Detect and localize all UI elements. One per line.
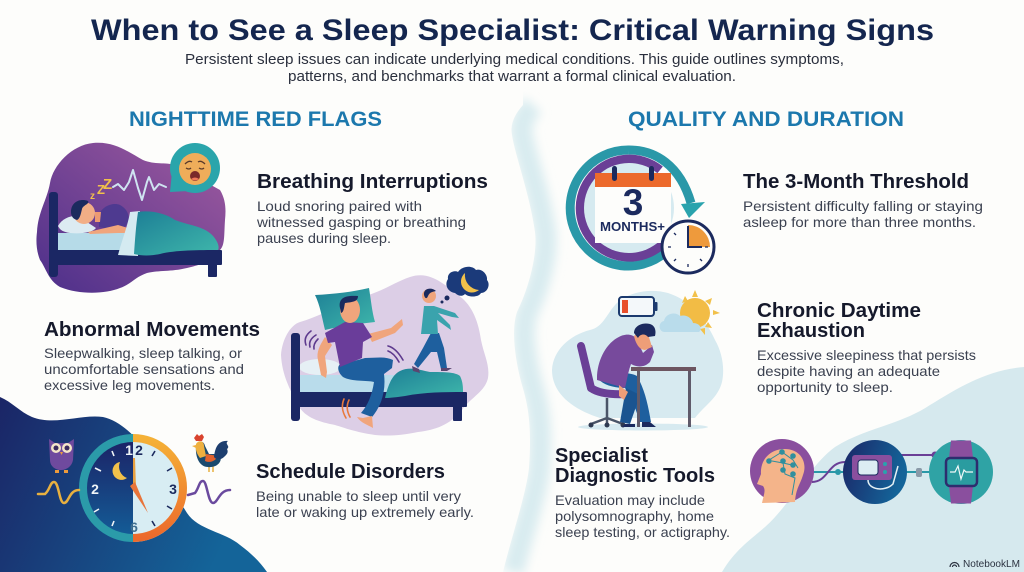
clock: 3: [169, 481, 177, 497]
connectors: [812, 455, 935, 482]
calendar: [595, 166, 671, 243]
small clock: [662, 221, 714, 273]
text: chronic daytime exhaustion: Excessive sleepiness that persists: [757, 347, 976, 363]
icon: owl: [49, 439, 74, 473]
panel: daytime exhaustion illustration: [552, 290, 723, 430]
sleepwalking child: [412, 289, 459, 373]
icon: low battery: [619, 297, 658, 316]
text: the 3-month threshold: asleep for more than three months.: [743, 214, 976, 230]
text: abnormal movements: excessive leg movements.: [44, 377, 215, 393]
text: abnormal movements: Sleepwalking, sleep talking, or: [44, 345, 242, 361]
text: abnormal movements: uncomfortable sensations and: [44, 361, 244, 377]
background wave: centre pale band: [0, 0, 546, 572]
brand label: NotebookLM: NotebookLM: [963, 558, 1020, 570]
panel: breathing interruptions illustration: [36, 143, 225, 293]
text: specialist diagnostic tools: Evaluation may include: [555, 492, 705, 508]
text: the 3-month threshold: The 3-Month Threshold: [743, 171, 969, 193]
clock: 2: [91, 481, 99, 497]
icon: home sleep test device: [843, 440, 907, 504]
clock: [79, 434, 187, 542]
cycle arrow ring: [570, 150, 705, 266]
sleeping person: [71, 200, 129, 234]
calendar: MONTHS+: [600, 219, 665, 234]
panel: 3-month calendar illustration: [570, 150, 714, 273]
text: chronic daytime exhaustion: [757, 300, 976, 395]
pillow: [58, 216, 96, 233]
icon: actigraphy watch: [929, 440, 993, 504]
teal pillow: [315, 288, 375, 330]
text: specialist diagnostic tools: Diagnostic Tools: [555, 465, 715, 487]
subtitle: patterns, and benchmarks that warrant a formal clinical evaluation.: [288, 69, 736, 85]
bed: [49, 192, 222, 277]
panel: diagnostic tools illustration: [750, 439, 993, 504]
blanket: [118, 211, 219, 256]
dream cloud: [440, 267, 489, 304]
text: breathing interruptions: [256, 171, 488, 246]
clock: 6: [130, 519, 138, 535]
subtitle: [185, 52, 844, 85]
chair: [581, 346, 628, 428]
snore zzz: Z: [103, 176, 112, 193]
text: chronic daytime exhaustion: Chronic Daytime: [757, 300, 921, 322]
calendar: 3: [623, 182, 643, 223]
heading: nighttime red flags: NIGHTTIME RED FLAGS: [129, 108, 382, 131]
exhausted person: [597, 323, 656, 427]
snore wave: [113, 170, 166, 200]
text: breathing interruptions: Breathing Interruptions: [257, 171, 488, 193]
title: When to See a Sleep Specialist: Critical Warning Signs: [91, 14, 934, 47]
subtitle: Persistent sleep issues can indicate underlying medical conditions. This guide outlines symptoms,: [185, 52, 844, 68]
desk: [631, 367, 696, 427]
clock: 1: [125, 442, 133, 458]
snore zzz: z: [90, 191, 95, 202]
text: schedule disorders: late or waking up extremely early.: [256, 504, 474, 520]
wave: owl rhythm: [38, 482, 79, 503]
wave: rooster rhythm: [188, 481, 230, 503]
icon: head with electrodes: [750, 439, 814, 503]
heading: quality and duration: QUALITY AND DURATION: [628, 108, 904, 131]
text: breathing interruptions: witnessed gasping or breathing: [256, 214, 466, 230]
text: specialist diagnostic tools: Specialist: [555, 445, 648, 467]
bed and mattress: [291, 333, 467, 421]
text: the 3-month threshold: [743, 171, 983, 230]
clock: 2: [135, 442, 143, 458]
text: breathing interruptions: Loud snoring paired with: [257, 198, 422, 214]
text: abnormal movements: [44, 319, 260, 393]
icon: rooster: [192, 434, 228, 472]
icon: sun and cloud: [660, 290, 720, 335]
snore zzz: Z: [97, 182, 105, 197]
motion arcs: [305, 331, 403, 418]
panel: abnormal movements illustration: [281, 267, 489, 436]
panel: schedule disorders clock illustration: [38, 434, 230, 542]
background wave: bottom-right pale blue: [722, 367, 1024, 572]
text: specialist diagnostic tools: [555, 445, 730, 540]
text: chronic daytime exhaustion: Exhaustion: [757, 320, 865, 342]
text: specialist diagnostic tools: polysomnography, home: [555, 508, 714, 524]
text: chronic daytime exhaustion: opportunity to sleep.: [757, 379, 893, 395]
text: schedule disorders: Being unable to sleep until very: [256, 488, 461, 504]
text: abnormal movements: Abnormal Movements: [44, 319, 260, 341]
text: schedule disorders: Schedule Disorders: [256, 461, 445, 483]
text: breathing interruptions: pauses during sleep.: [257, 230, 391, 246]
man sitting up: [317, 296, 403, 428]
teal blanket: [385, 369, 463, 398]
text: chronic daytime exhaustion: despite having an adequate: [757, 363, 940, 379]
text: schedule disorders: [256, 461, 474, 520]
background wave: bottom-left navy: [0, 397, 267, 572]
snore zzz: [90, 176, 112, 202]
text: specialist diagnostic tools: sleep testing, or actigraphy.: [555, 524, 730, 540]
icon: gasping face bubble: [170, 143, 220, 193]
text: the 3-month threshold: Persistent difficulty falling or staying: [743, 198, 983, 214]
